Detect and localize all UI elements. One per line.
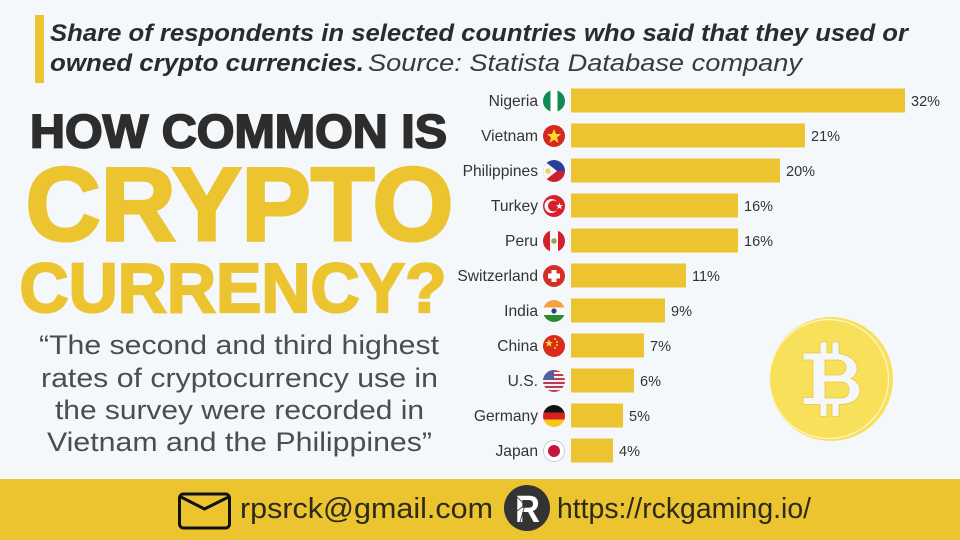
row: Nigeria: 32%	[911, 94, 940, 110]
row: Peru: 16%	[744, 234, 773, 250]
row: Japan: Japan	[496, 443, 538, 460]
title: CURRENCY?	[20, 249, 446, 327]
row: U.S.: U.S.	[508, 373, 538, 390]
row: Peru: Peru	[505, 233, 538, 250]
row: Japan: 4%	[619, 444, 640, 460]
icon: bitcoin coin	[769, 317, 893, 441]
row: Germany: Germany	[474, 408, 538, 425]
row: Vietnam: 21%	[811, 129, 840, 145]
row: India: 9%	[671, 304, 692, 320]
row: India	[504, 298, 692, 322]
row: Philippines	[463, 158, 815, 182]
title	[20, 104, 454, 327]
row: Japan	[496, 438, 640, 462]
icon: R logo: R	[515, 489, 540, 531]
row: Philippines: Philippines	[463, 163, 538, 180]
row: Nigeria	[489, 88, 940, 112]
row: Germany	[474, 404, 650, 428]
row: Vietnam	[481, 124, 840, 148]
row: Philippines: 20%	[786, 164, 815, 180]
bar chart	[457, 88, 940, 462]
email address: rpsrck@gmail.com	[240, 493, 493, 525]
row: Switzerland: 11%	[692, 269, 720, 285]
quote	[39, 330, 440, 457]
website address: https://rckgaming.io/	[557, 493, 812, 525]
row: Turkey	[491, 194, 773, 218]
row: Turkey: 16%	[744, 199, 773, 215]
row: China	[497, 334, 671, 358]
row: U.S.: 6%	[640, 374, 661, 390]
row: India: India	[504, 303, 538, 320]
quote: Vietnam and the Philippines”	[47, 427, 432, 457]
row: Turkey: Turkey	[491, 198, 538, 215]
quote: “The second and third highest	[39, 330, 440, 360]
title: HOW COMMON IS	[30, 104, 447, 158]
row: Nigeria: Nigeria	[489, 93, 538, 110]
row: Switzerland	[457, 264, 720, 288]
title: CRYPTO	[26, 147, 454, 263]
row: Vietnam: Vietnam	[481, 128, 538, 145]
quote: the survey were recorded in	[55, 395, 424, 425]
row: China: 7%	[650, 339, 671, 355]
header accent and description: owned crypto currencies.	[50, 50, 364, 77]
row: U.S.	[508, 368, 661, 392]
header accent and description: Share of respondents in selected countries who said that they used or	[50, 20, 910, 47]
row: Peru	[505, 228, 773, 252]
header accent and description	[35, 15, 910, 83]
row: China: China	[497, 338, 538, 355]
icon: R logo	[504, 485, 550, 531]
row: Switzerland: Switzerland	[457, 268, 538, 285]
quote: rates of cryptocurrency use in	[41, 363, 438, 393]
footer band	[0, 479, 960, 540]
icon: envelope	[180, 494, 230, 528]
header accent and description: Source: Statista Database company	[368, 50, 804, 77]
row: Germany: 5%	[629, 409, 650, 425]
